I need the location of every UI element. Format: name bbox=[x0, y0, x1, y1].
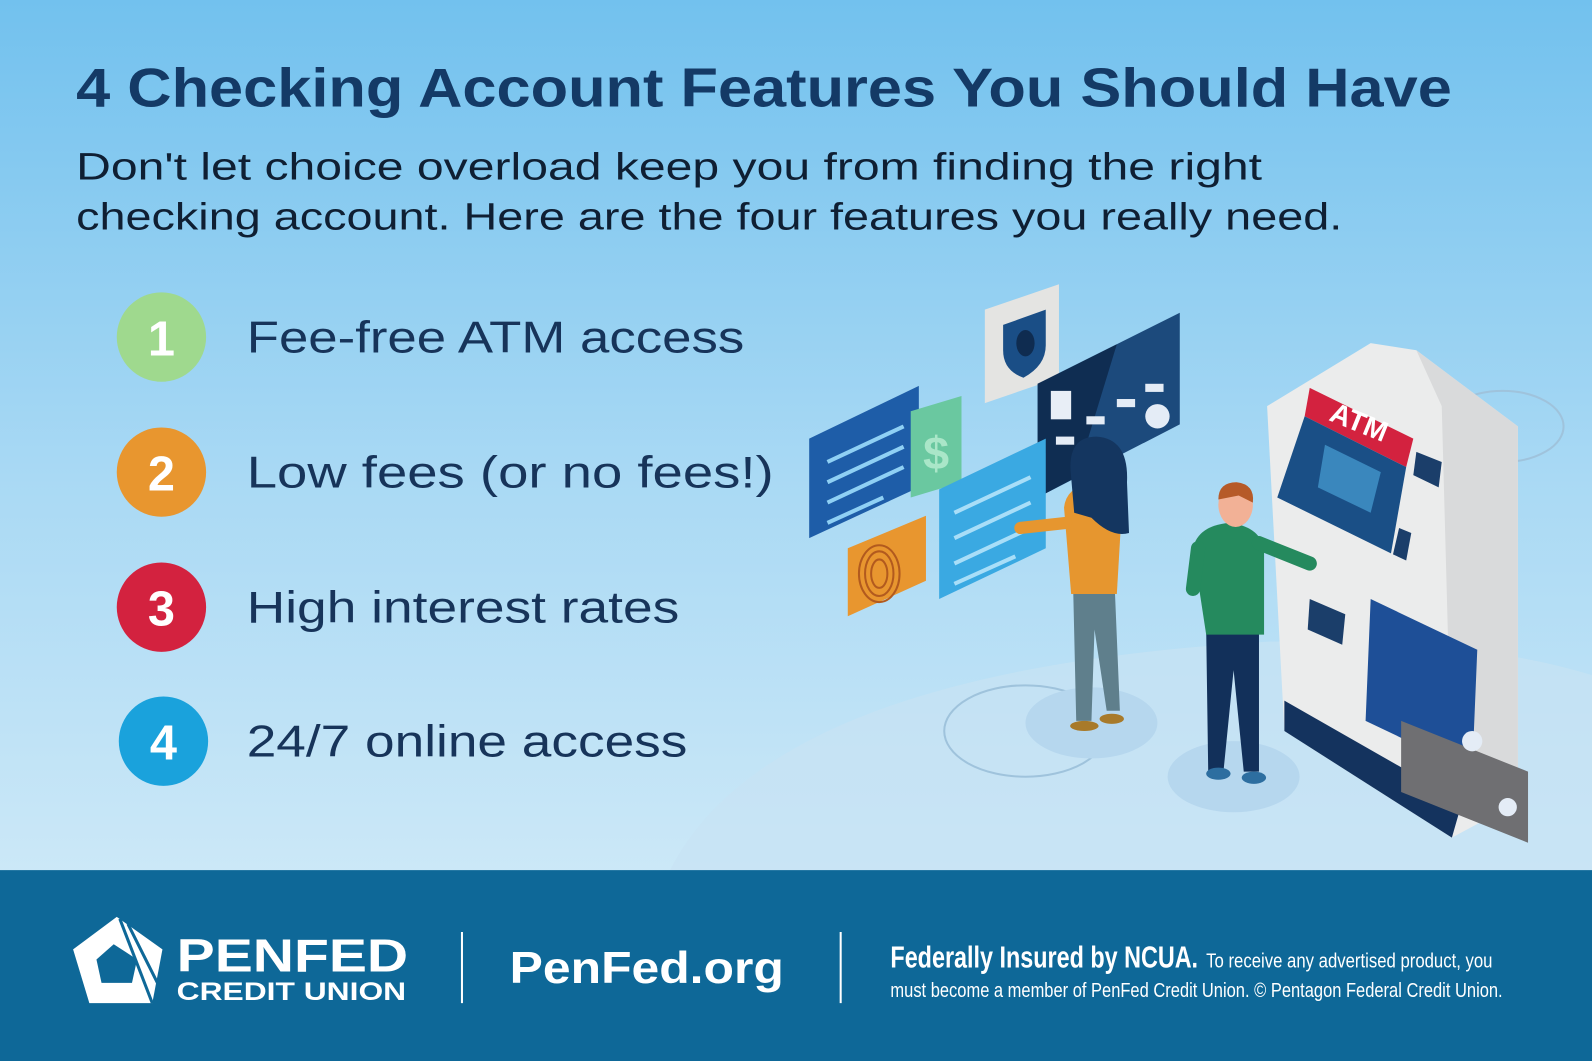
ATM machine: ATM bbox=[1325, 397, 1392, 449]
item 2: Low fees (or no fees!) bbox=[247, 448, 774, 497]
subtitle: Don't let choice overload keep you from finding the right bbox=[76, 146, 1263, 188]
item 2 bbox=[117, 427, 774, 517]
icon: blue document bbox=[809, 386, 919, 538]
logo: wordmark: CREDIT UNION bbox=[177, 978, 406, 1006]
disclaimer bbox=[890, 941, 1503, 1002]
item 3: 3 bbox=[148, 582, 175, 636]
footer band bbox=[0, 870, 1592, 1061]
subtitle: checking account. Here are the four features you really need. bbox=[76, 195, 1342, 237]
man bbox=[1193, 482, 1310, 784]
item 1: 1 bbox=[148, 312, 175, 366]
logo: pentagon icon bbox=[73, 917, 162, 1003]
woman bbox=[1020, 437, 1129, 731]
disclaimer: To receive any advertised product, you bbox=[1206, 951, 1492, 973]
icon: dark bank card bbox=[1038, 313, 1180, 498]
title: 4 Checking Account Features You Should Have bbox=[76, 57, 1452, 119]
icon: dollar tile: $ bbox=[923, 427, 949, 479]
logo: wordmark bbox=[177, 930, 408, 1006]
feature list bbox=[117, 292, 774, 786]
icon: dollar tile bbox=[911, 396, 961, 498]
icon: light blue document bbox=[939, 439, 1046, 599]
item 3: High interest rates bbox=[247, 583, 679, 632]
item 1: Fee-free ATM access bbox=[247, 313, 744, 362]
item 1 bbox=[117, 292, 744, 382]
subtitle bbox=[76, 146, 1342, 237]
icon: fingerprint bbox=[848, 516, 926, 616]
disclaimer: Federally Insured by NCUA. bbox=[890, 941, 1198, 975]
item 4: 4 bbox=[150, 716, 177, 770]
ground shape bbox=[670, 641, 1592, 870]
item 2: 2 bbox=[148, 447, 175, 501]
item 3 bbox=[117, 562, 679, 652]
icon: shield tile bbox=[985, 284, 1059, 403]
item 4: 24/7 online access bbox=[247, 717, 687, 766]
illustration: people at ATM bbox=[809, 284, 1564, 843]
ATM machine bbox=[1267, 343, 1528, 843]
website: PenFed.org bbox=[510, 944, 784, 993]
item 4 bbox=[119, 697, 687, 786]
logo: wordmark: PENFED bbox=[177, 930, 408, 982]
